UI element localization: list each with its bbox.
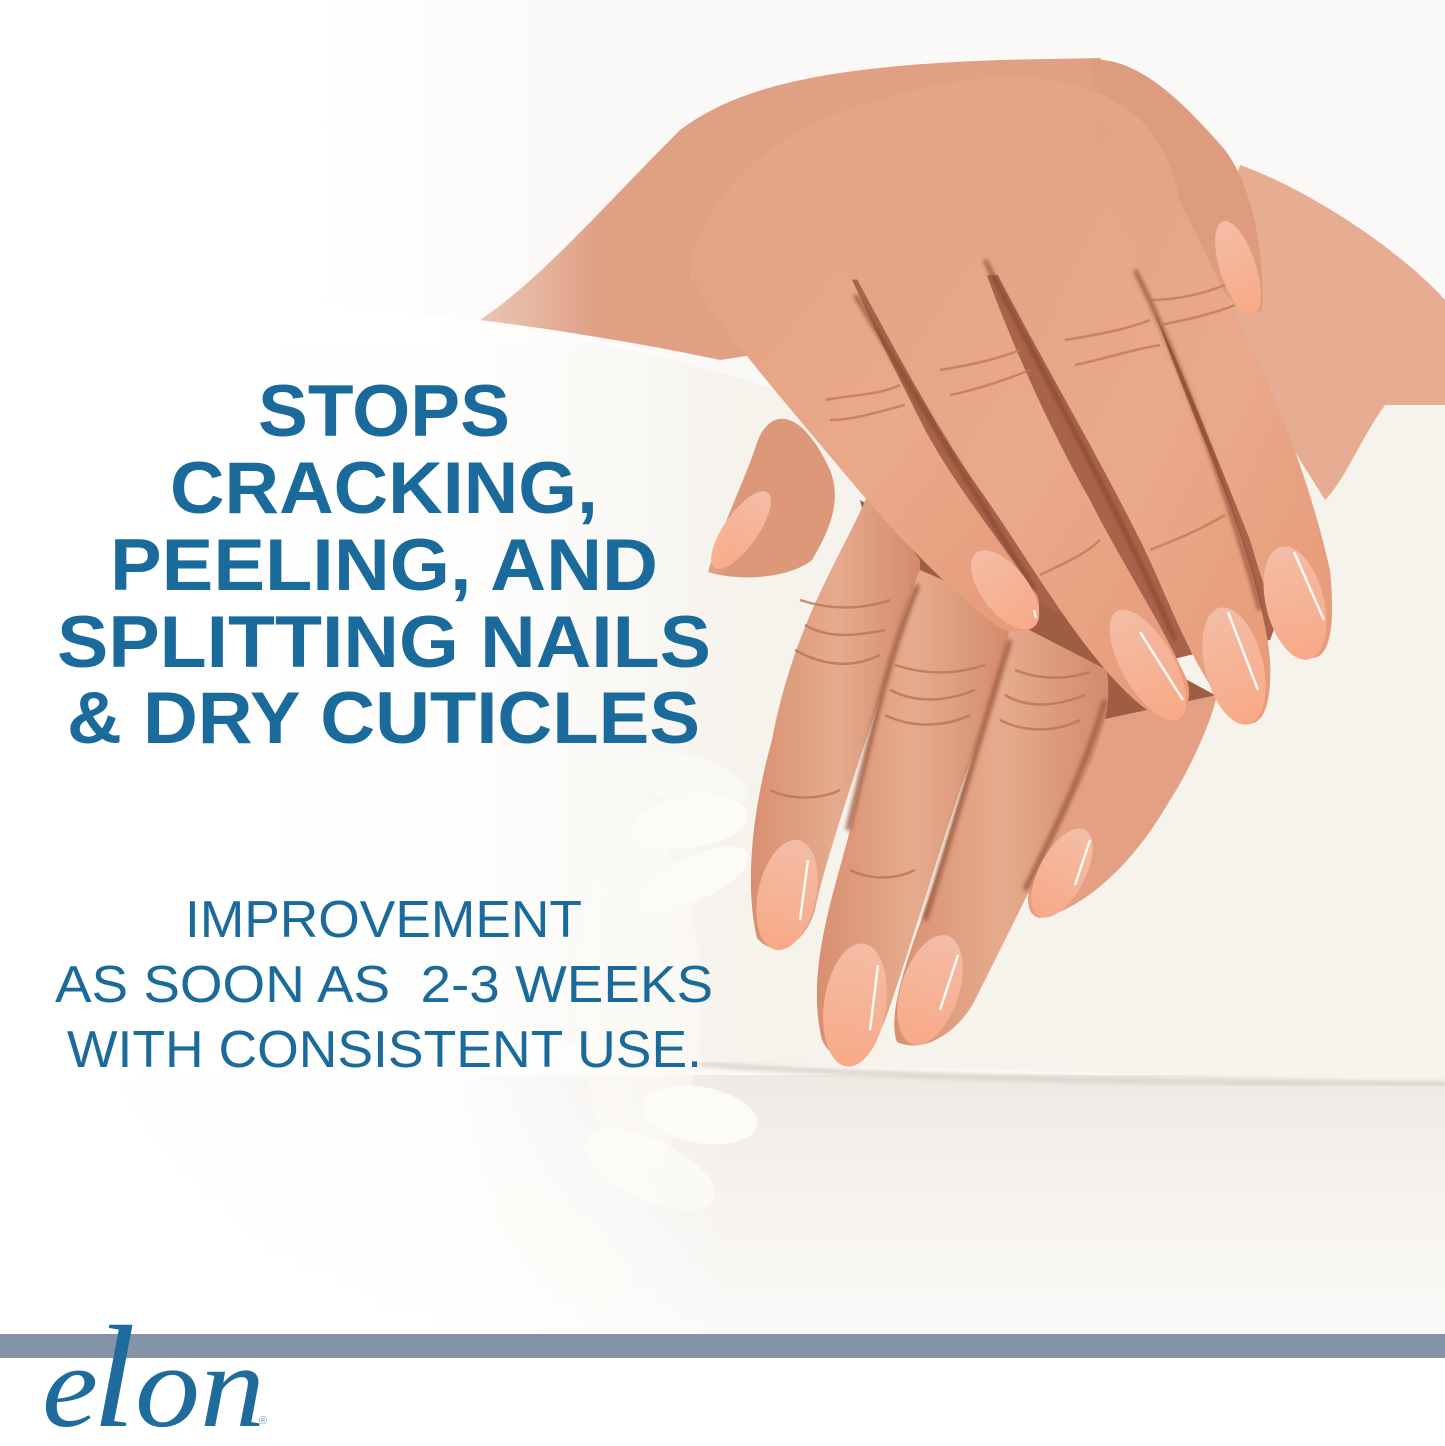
logo: elon: ® xyxy=(259,1415,267,1427)
dark gaps behind fingers xyxy=(840,270,1300,660)
nail: finger four xyxy=(1019,819,1105,927)
subheading xyxy=(55,891,713,1079)
lower hand thumb xyxy=(708,419,835,577)
separation lines xyxy=(848,585,1105,920)
footer band xyxy=(0,1334,1445,1358)
finger: ring xyxy=(985,120,1270,724)
heading: SPLITTING NAILS xyxy=(57,602,711,683)
heading xyxy=(57,371,711,759)
nail: upper thumb xyxy=(1206,216,1270,320)
heading: STOPS xyxy=(258,371,510,452)
nail: finger one xyxy=(747,834,827,956)
nail: finger two xyxy=(816,939,894,1071)
finger three xyxy=(894,620,1108,1046)
nail highlights xyxy=(800,552,1324,1030)
finger one xyxy=(751,490,920,948)
white fade over sleeve and arm xyxy=(0,0,600,345)
finger separations xyxy=(855,260,1260,640)
heading: & DRY CUTICLES xyxy=(67,678,700,759)
nail: middle xyxy=(1094,598,1202,732)
lower hand palm under upper fingers xyxy=(860,500,1215,780)
photo: cream flower petals xyxy=(477,741,762,1322)
knuckles xyxy=(825,285,1235,575)
subheading: AS SOON AS 2-3 WEEKS xyxy=(55,956,713,1014)
photo: lower hand xyxy=(701,419,1217,1071)
nail: thumb xyxy=(701,483,781,577)
footer white area xyxy=(0,1358,1445,1446)
logo: elon xyxy=(42,1296,267,1446)
knuckle wrinkles xyxy=(770,600,1090,878)
finger two xyxy=(817,570,1012,1060)
photo: table surface xyxy=(0,1075,1445,1334)
nail: index xyxy=(958,539,1052,641)
finger four xyxy=(1028,695,1217,918)
finger: middle xyxy=(830,170,1189,716)
heading: PEELING, AND xyxy=(110,525,658,606)
upper thumb xyxy=(1090,60,1263,313)
hand back xyxy=(690,77,1180,310)
photo: upper hand xyxy=(690,60,1337,1030)
subheading: WITH CONSISTENT USE. xyxy=(67,1021,702,1079)
nail: pinky xyxy=(1253,540,1337,666)
photo: arm and back of lower hand xyxy=(480,58,1445,500)
white fade over towel and flower xyxy=(0,300,730,1334)
heading: CRACKING, xyxy=(170,448,598,529)
photo: towel xyxy=(280,300,1445,1084)
finger: index xyxy=(695,210,1039,632)
nail: ring xyxy=(1191,601,1277,731)
nail: finger three xyxy=(885,927,975,1053)
subheading: IMPROVEMENT xyxy=(185,891,582,949)
finger: pinky xyxy=(1090,110,1332,658)
